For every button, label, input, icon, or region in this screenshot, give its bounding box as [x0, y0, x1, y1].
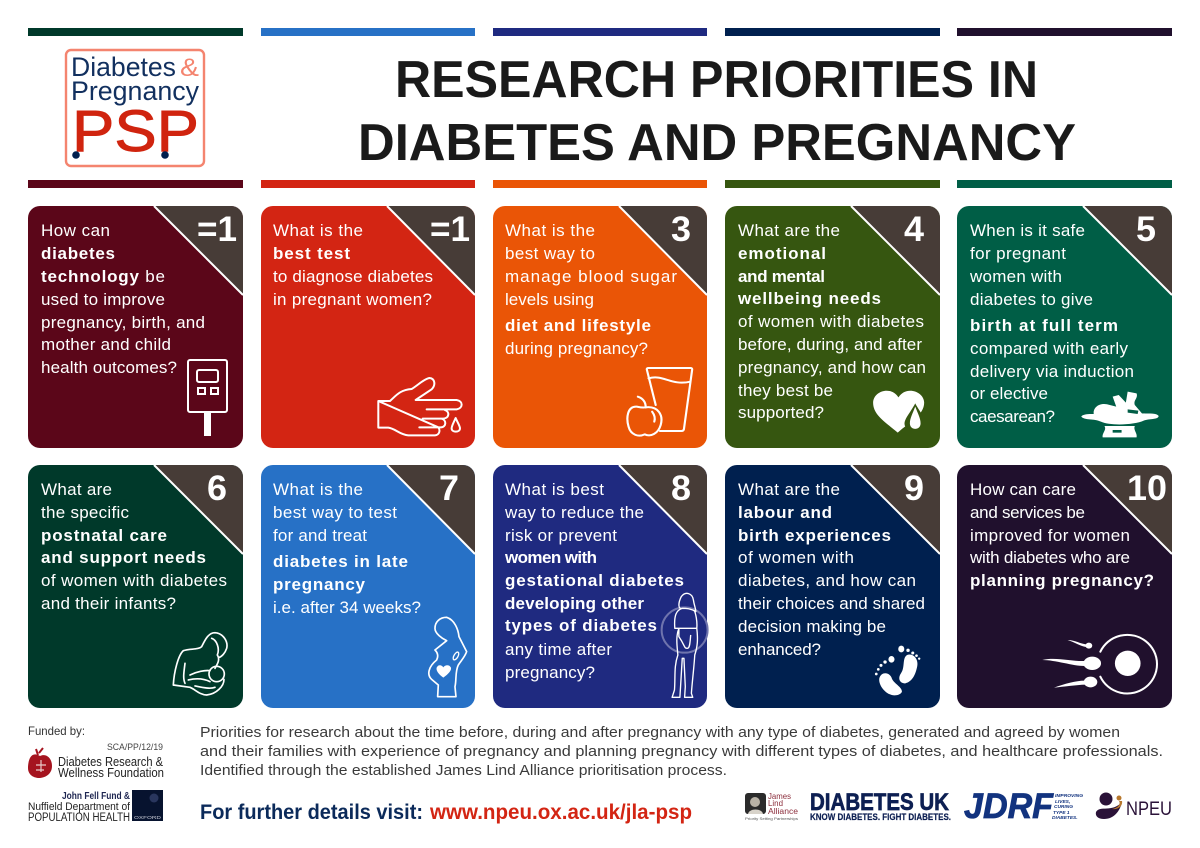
- panel: priority 8 gestational diabetes: [493, 465, 708, 708]
- question text: for pregnant: [970, 244, 1066, 263]
- question text: emotional: [738, 244, 826, 263]
- question text: [505, 221, 677, 358]
- rank badge 8: 8: [671, 469, 691, 508]
- question text: [504, 480, 684, 682]
- logo: NPEU: NPEU: [1126, 799, 1172, 820]
- question text: levels using: [505, 290, 594, 309]
- icon: hand with blood drop: [378, 378, 462, 435]
- logo: Diabetes and Pregnancy PSP: PSP: [72, 99, 199, 164]
- question text: best way to test: [273, 503, 397, 522]
- rank badge 4: [851, 206, 940, 295]
- question text: used to improve: [41, 290, 165, 309]
- panel: priority =1 diabetes technology: [28, 206, 243, 448]
- icon: mother nursing baby: [173, 633, 227, 695]
- question text: birth at full term: [970, 316, 1118, 335]
- question text: What is the: [273, 480, 363, 499]
- description text: [200, 724, 1163, 779]
- question text: When is it safe: [970, 221, 1085, 240]
- question text: developing other: [505, 594, 644, 613]
- question text: [737, 221, 926, 422]
- question text: their choices and shared: [738, 594, 925, 613]
- question text: women with: [969, 267, 1062, 286]
- title: DIABETES AND PREGNANCY: [358, 114, 1076, 172]
- icon: sperm and egg: [1042, 635, 1157, 693]
- question text: technology be: [41, 267, 165, 286]
- rank badge 7: 7: [439, 469, 459, 508]
- funder: Diabetes Research and Wellness Foundation: SCA/PP/12/19: [107, 742, 163, 752]
- question text: they best be: [738, 381, 833, 400]
- question text: in pregnant women?: [273, 290, 432, 309]
- further details link: www.npeu.ox.ac.uk/jla-psp: [429, 801, 692, 824]
- question text: or elective: [970, 384, 1048, 403]
- question text: to diagnose diabetes: [273, 267, 433, 286]
- further details link: For further details visit:: [200, 801, 423, 824]
- rank badge 3: 3: [671, 210, 691, 249]
- question text: diet and lifestyle: [505, 316, 651, 335]
- question text: and support needs: [41, 548, 206, 567]
- question text: best test: [273, 244, 350, 263]
- funder: John Fell Fund and Nuffield Department: John Fell Fund &: [62, 790, 130, 802]
- logo: James Lind Alliance: James: [768, 792, 791, 801]
- logo: NPEU: [1096, 792, 1172, 820]
- question text: How can: [41, 221, 110, 240]
- panel: priority 4 emotional and mental wellbeing: [725, 206, 940, 448]
- question text: caesarean?: [970, 407, 1055, 426]
- question text: of women with: [738, 548, 854, 567]
- question text: decision making be: [738, 617, 886, 636]
- description text: Priorities for research about the time before, during and after pregnancy with any type of diabetes, generated and agreed by women: [200, 724, 1120, 741]
- question text: labour and: [738, 503, 832, 522]
- question text: before, during, and after: [738, 335, 922, 354]
- question text: way to reduce the: [504, 503, 644, 522]
- logo: Diabetes and Pregnancy PSP: Diabetes: [71, 52, 176, 82]
- icon: glass and apple: [627, 368, 692, 436]
- question text: What are: [41, 480, 112, 499]
- title: RESEARCH PRIORITIES IN: [395, 51, 1038, 109]
- funder: John Fell Fund and Nuffield Department: Nuffield Department of: [28, 801, 131, 813]
- icon: standing woman: [662, 593, 708, 697]
- question text: pregnancy: [273, 575, 366, 594]
- question text: risk or prevent: [505, 526, 617, 545]
- question text: health outcomes?: [41, 358, 177, 377]
- logo: JDRF: JDRF: [964, 787, 1055, 826]
- funder: Diabetes Research and Wellness Foundation: Wellness Foundation: [58, 765, 164, 780]
- question text: best way to: [505, 244, 595, 263]
- logo: Diabetes and Pregnancy PSP: Pregnancy: [71, 76, 199, 106]
- question text: diabetes, and how can: [738, 571, 916, 590]
- panel: priority 9 labour and birth experiences: [725, 465, 940, 708]
- question text: and services be: [970, 503, 1085, 522]
- logo: JDRF: LIVES,: [1055, 799, 1070, 805]
- question text: [273, 480, 421, 617]
- logo: Diabetes UK: DIABETES UK: [810, 789, 950, 816]
- question text: [41, 480, 227, 613]
- funder: Diabetes Research and Wellness Foundation: [28, 742, 164, 780]
- logo: Diabetes and Pregnancy PSP: &: [180, 54, 199, 82]
- rank badge 6: [154, 465, 243, 554]
- question text: types of diabetes: [505, 616, 657, 635]
- top colour bars: [28, 28, 1172, 36]
- question text: and mental: [738, 267, 825, 286]
- logo: Diabetes and Pregnancy PSP: [66, 50, 204, 166]
- rank badge 6: 6: [207, 469, 227, 508]
- question text: diabetes: [41, 244, 115, 263]
- funder: John Fell Fund and Nuffield Department: OXFORD: [134, 815, 162, 820]
- rank badge 8: [619, 465, 707, 554]
- rank badge 10: 10: [1127, 469, 1167, 508]
- logo: JDRF: TYPE 1: [1053, 810, 1070, 816]
- rank badge 3: [619, 206, 707, 295]
- rank badge =1: [387, 206, 475, 295]
- question text: [969, 480, 1154, 590]
- logo: JDRF: DIABETES.: [1052, 815, 1078, 821]
- question text: manage blood sugar: [505, 267, 677, 286]
- question text: pregnancy, and how can: [738, 358, 926, 377]
- panel: priority 10 planning pregnancy: [957, 465, 1172, 708]
- logo: JDRF: IMPROVING: [1055, 793, 1083, 799]
- funded by heading: Funded by:: [28, 724, 85, 738]
- panel: priority 5 birth at full term: [957, 206, 1172, 448]
- icon: pregnant woman with heart: [429, 617, 467, 697]
- question text: the specific: [41, 503, 130, 522]
- rank badge 5: 5: [1136, 210, 1156, 249]
- question text: What are the: [738, 221, 840, 240]
- question text: i.e. after 34 weeks?: [273, 598, 421, 617]
- panel: priority =1 best test: [261, 206, 475, 448]
- panel: priority 6 postnatal care: [28, 465, 243, 708]
- lower colour bars: [28, 180, 1172, 188]
- rank badge 10: [1083, 465, 1172, 554]
- question text: diabetes in late: [273, 552, 408, 571]
- question text: of women with diabetes: [41, 571, 227, 590]
- logo: James Lind Alliance: Lind: [768, 799, 783, 808]
- question text: compared with early: [970, 339, 1128, 358]
- question text: pregnancy, birth, and: [41, 313, 205, 332]
- question text: postnatal care: [41, 526, 167, 545]
- icon: glucose meter: [188, 360, 227, 436]
- icon: baby on scales: [1081, 392, 1159, 437]
- logo: Diabetes UK: KNOW DIABETES. FIGHT DIABETES.: [810, 812, 951, 822]
- funder: Diabetes Research and Wellness Foundation: Diabetes Research &: [58, 754, 163, 769]
- funder: John Fell Fund and Nuffield Department: POPULATION HEALTH: [28, 812, 130, 824]
- question text: How can care: [970, 480, 1076, 499]
- logo: James Lind Alliance: [745, 792, 799, 821]
- rank badge =1: [154, 206, 243, 295]
- question text: any time after: [505, 640, 612, 659]
- question text: of women with diabetes: [738, 312, 924, 331]
- question text: for and treat: [273, 526, 367, 545]
- question text: pregnancy?: [505, 663, 595, 682]
- question text: supported?: [738, 403, 824, 422]
- question text: [969, 221, 1134, 426]
- question text: What are the: [738, 480, 840, 499]
- description text: and their families with experience of pregnancy and planning pregnancy with different types of diabetes, and healthcare professionals.: [200, 743, 1163, 760]
- question text: mother and child: [41, 335, 171, 354]
- rank badge =1: =1: [197, 210, 237, 249]
- icon: baby footprints: [875, 646, 920, 695]
- logo: James Lind Alliance: Priority Setting Partnerships: [745, 816, 798, 821]
- question text: planning pregnancy?: [970, 571, 1154, 590]
- question text: women with: [504, 548, 597, 567]
- panel: priority 7 diabetes in late pregnancy: [261, 465, 475, 708]
- question text: and their infants?: [41, 594, 176, 613]
- description text: Identified through the established James Lind Alliance prioritisation process.: [200, 762, 727, 779]
- rank badge 9: 9: [904, 469, 924, 508]
- question text: delivery via induction: [970, 362, 1134, 381]
- rank badge 4: 4: [904, 210, 925, 249]
- question text: [738, 480, 925, 659]
- question text: improved for women: [970, 526, 1130, 545]
- question text: What is best: [505, 480, 604, 499]
- question text: diabetes to give: [970, 290, 1093, 309]
- panel: priority 3 diet and lifestyle: [493, 206, 707, 448]
- rank badge =1: =1: [430, 210, 470, 249]
- rank badge 7: [387, 465, 475, 554]
- title: [358, 51, 1076, 172]
- question text: during pregnancy?: [505, 339, 648, 358]
- logo: James Lind Alliance: Alliance: [768, 807, 799, 816]
- question text: [41, 221, 205, 377]
- question text: What is the: [505, 221, 595, 240]
- question text: What is the: [273, 221, 363, 240]
- question text: wellbeing needs: [737, 289, 881, 308]
- rank badge 9: [851, 465, 940, 554]
- further details link: [200, 801, 692, 824]
- question text: gestational diabetes: [505, 571, 684, 590]
- question text: [273, 221, 433, 309]
- rank badge 5: [1083, 206, 1172, 295]
- question text: with diabetes who are: [969, 548, 1130, 567]
- funder: John Fell Fund and Nuffield Department: [28, 790, 163, 824]
- logo: JDRF: CURING: [1054, 804, 1073, 810]
- icon: heart with drop: [873, 391, 926, 433]
- question text: birth experiences: [738, 526, 891, 545]
- question text: enhanced?: [738, 640, 821, 659]
